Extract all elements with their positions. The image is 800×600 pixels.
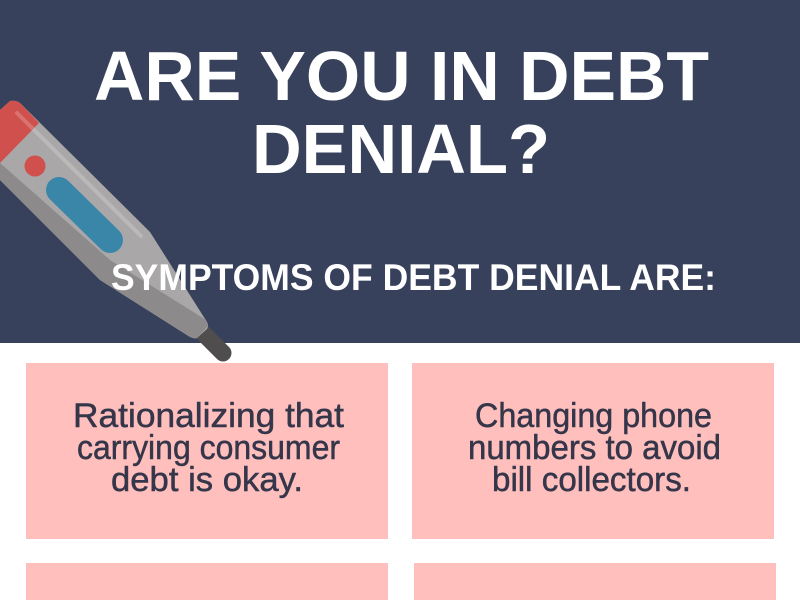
card: rationalizing: Rationalizing that [73, 397, 345, 435]
card: lower left [26, 563, 388, 600]
title: ARE YOU IN DEBT [94, 37, 709, 115]
card: changing phone numbers: Changing phone [475, 397, 712, 435]
card: lower right [414, 563, 776, 600]
header panel [0, 0, 800, 343]
card: changing phone numbers [412, 363, 774, 539]
card: rationalizing: debt is okay. [111, 461, 303, 499]
subheading: SYMPTOMS OF DEBT DENIAL ARE: [111, 257, 716, 298]
icon: thermometer [0, 101, 223, 353]
card: rationalizing [26, 363, 388, 539]
card: rationalizing: carrying consumer [77, 429, 340, 467]
card: changing phone numbers: numbers to avoid [468, 429, 721, 467]
card: changing phone numbers: bill collectors. [492, 461, 691, 499]
title: DENIAL? [252, 110, 550, 188]
title [94, 37, 709, 188]
